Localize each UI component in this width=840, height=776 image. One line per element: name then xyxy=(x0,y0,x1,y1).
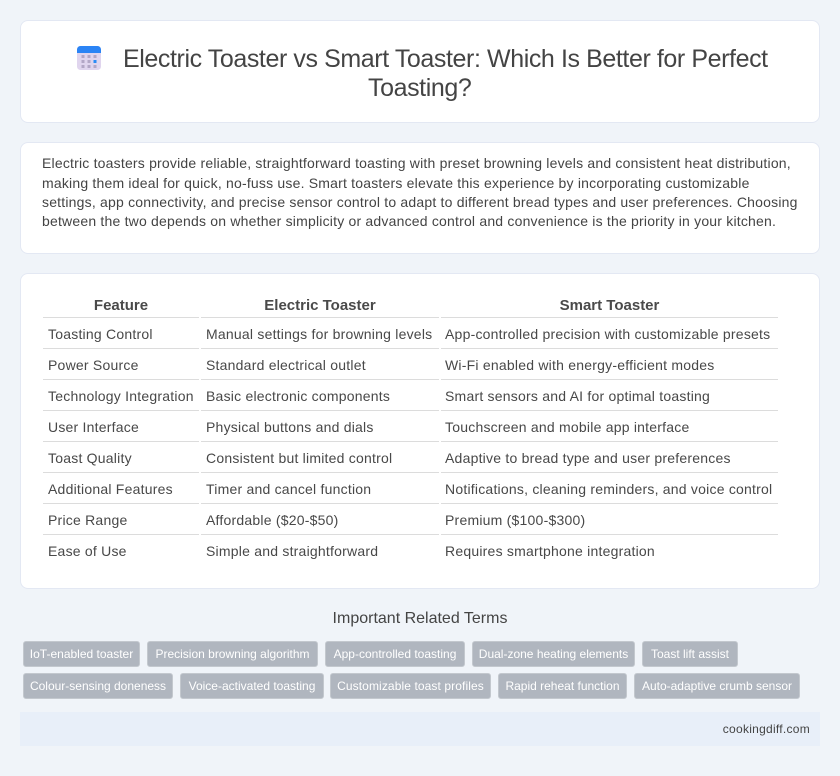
row: Toasting Control xyxy=(48,326,770,342)
row: Toasting Control: Manual settings for browning levels xyxy=(206,326,432,342)
footer text: cookingdiff.com xyxy=(723,722,810,736)
tag: Toast lift assist xyxy=(651,647,729,661)
tag: Voice-activated toasting xyxy=(189,679,315,693)
row: Additional Features: Timer and cancel function xyxy=(206,481,371,497)
tag: IoT-enabled toaster xyxy=(30,647,133,661)
tag: Colour-sensing doneness xyxy=(30,679,166,693)
panel: comparison table card xyxy=(20,273,820,589)
row: User Interface: User Interface xyxy=(48,419,139,435)
text: intro paragraph: settings, app connectivity, and precise sensor control to adapt to different bread types and user preferences. Choosing xyxy=(42,194,798,210)
tag xyxy=(23,673,173,699)
text: intro paragraph: making them ideal for quick, no-fuss use. Smart toasters elevate this experience by incorporating customizable xyxy=(42,175,750,191)
tag: Customizable toast profiles xyxy=(337,679,484,693)
row: Ease of Use: Ease of Use xyxy=(48,543,127,559)
heading: title line 1: Electric Toaster vs Smart Toaster: Which Is Better for Perfect xyxy=(123,45,768,73)
table header xyxy=(94,297,660,314)
row: Technology Integration: Smart sensors and AI for optimal toasting xyxy=(445,388,710,404)
tag xyxy=(634,673,800,699)
footer bar xyxy=(20,712,820,746)
icon: calendar xyxy=(77,46,101,70)
tag xyxy=(498,673,627,699)
row: Technology Integration xyxy=(48,388,710,404)
tag: Rapid reheat function xyxy=(505,679,620,693)
row: Toast Quality xyxy=(48,450,731,466)
tag xyxy=(472,641,635,667)
row: Technology Integration: Basic electronic components xyxy=(206,388,390,404)
tag: Dual-zone heating elements xyxy=(479,647,628,661)
panel: title card xyxy=(20,20,820,123)
tag xyxy=(642,641,738,667)
text: intro paragraph: Electric toasters provide reliable, straightforward toasting with preset browning levels and consistent heat distribution, xyxy=(42,155,791,171)
row: Price Range: Premium ($100-$300) xyxy=(445,512,585,528)
table header: Electric Toaster xyxy=(264,297,376,314)
row: Ease of Use: Requires smartphone integration xyxy=(445,543,655,559)
table header: Feature xyxy=(94,297,148,314)
row: User Interface: Physical buttons and dials xyxy=(206,419,374,435)
row: Technology Integration: Technology Integration xyxy=(48,388,194,404)
row: Toast Quality: Toast Quality xyxy=(48,450,132,466)
row: Toast Quality: Consistent but limited control xyxy=(206,450,392,466)
panel: intro card xyxy=(20,142,820,254)
row: Power Source: Standard electrical outlet xyxy=(206,357,366,373)
row: Power Source xyxy=(48,357,714,373)
table: comparison xyxy=(43,297,778,559)
table header: Smart Toaster xyxy=(560,297,659,314)
tag xyxy=(330,673,491,699)
row: Ease of Use xyxy=(48,543,655,559)
row: Price Range: Price Range xyxy=(48,512,127,528)
row: Price Range: Affordable ($20-$50) xyxy=(206,512,339,528)
tag xyxy=(147,641,318,667)
row: Power Source: Power Source xyxy=(48,357,139,373)
row: Ease of Use: Simple and straightforward xyxy=(206,543,378,559)
tags: related terms xyxy=(23,641,800,699)
row: Additional Features xyxy=(48,481,772,497)
heading: title line 2: Toasting? xyxy=(368,74,471,102)
tag: App-controlled toasting xyxy=(334,647,456,661)
text: intro paragraph xyxy=(42,155,798,229)
row: Toasting Control: App-controlled precision with customizable presets xyxy=(445,326,770,342)
row: Toast Quality: Adaptive to bread type and user preferences xyxy=(445,450,731,466)
row: Power Source: Wi-Fi enabled with energy-efficient modes xyxy=(445,357,714,373)
row: User Interface xyxy=(48,419,690,435)
row: Toasting Control: Toasting Control xyxy=(48,326,153,342)
heading: related terms: Important Related Terms xyxy=(333,610,507,627)
tag: Precision browning algorithm xyxy=(155,647,310,661)
tag xyxy=(23,641,140,667)
row: Price Range xyxy=(48,512,585,528)
tag: Auto-adaptive crumb sensor xyxy=(642,679,792,693)
text: intro paragraph: between the two depends on whether simplicity or advanced control and convenience is the priority in your kitchen. xyxy=(42,213,776,229)
row: Additional Features: Notifications, cleaning reminders, and voice control xyxy=(445,481,772,497)
row: Additional Features: Additional Features xyxy=(48,481,173,497)
tag xyxy=(180,673,324,699)
tag xyxy=(325,641,465,667)
row: User Interface: Touchscreen and mobile app interface xyxy=(445,419,690,435)
